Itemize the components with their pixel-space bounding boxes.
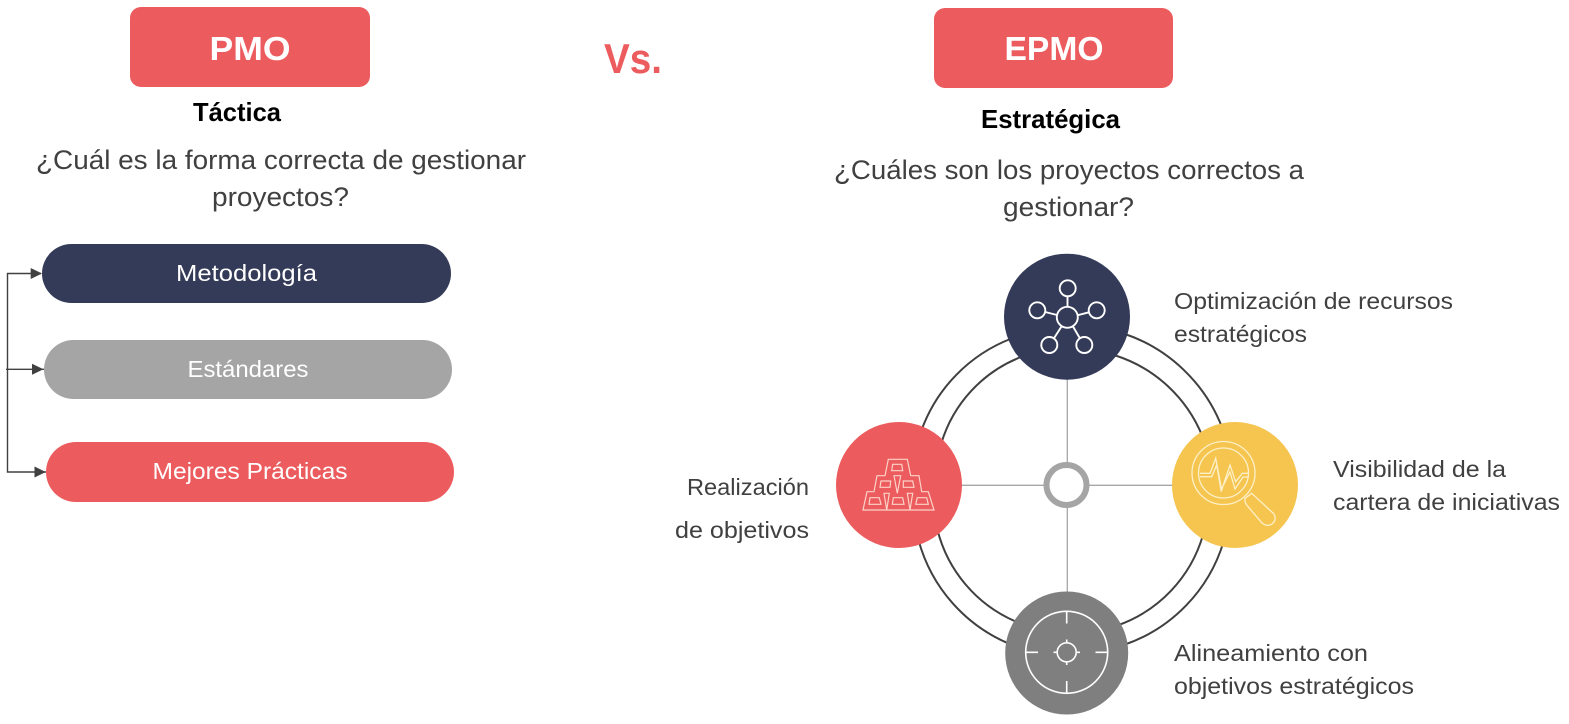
PMO subtitle: Táctica: Táctica (193, 97, 282, 127)
EPMO question: ¿Cuáles son los proyectos correctos a (834, 155, 1305, 185)
PMO question (36, 145, 526, 212)
label: Alineamiento con objetivos estratégicos (1174, 640, 1414, 699)
label: Visibilidad de la cartera de iniciativas: Visibilidad de la (1333, 456, 1506, 482)
EPMO question (834, 155, 1305, 222)
pill: Metodología: Metodología (176, 260, 317, 286)
EPMO question: gestionar? (1003, 192, 1134, 222)
icon: network on navy circle (1004, 254, 1130, 380)
concentric ring arcs (918, 334, 1224, 645)
Vs. heading: Vs. (604, 35, 662, 82)
center ring (1046, 465, 1086, 505)
pill: Estándares: Estándares (188, 356, 308, 382)
label: Alineamiento con objetivos estratégicos: Alineamiento con (1174, 640, 1368, 666)
label: Optimización de recursos estratégicos: Optimización de recursos (1174, 288, 1453, 314)
icon: target on grey circle (1005, 592, 1128, 714)
label: Visibilidad de la cartera de iniciativas: cartera de iniciativas (1333, 489, 1560, 515)
pill: Mejores Prácticas: Mejores Prácticas (152, 458, 348, 484)
EPMO badge (934, 8, 1173, 88)
label: Realización de objetivos: Realización (687, 474, 809, 500)
label: Visibilidad de la cartera de iniciativas (1333, 456, 1560, 515)
EPMO badge: EPMO (1004, 30, 1104, 67)
cross lines (899, 316, 1235, 654)
PMO badge (130, 7, 370, 87)
pill: Estándares (44, 340, 452, 399)
PMO question: proyectos? (212, 182, 349, 212)
label: Realización de objetivos (675, 474, 809, 543)
PMO question: ¿Cuál es la forma correcta de gestionar (36, 145, 526, 175)
PMO badge: PMO (210, 30, 290, 67)
icon: gold bars on red circle (836, 422, 962, 548)
label: Alineamiento con objetivos estratégicos: objetivos estratégicos (1174, 673, 1414, 699)
label: Optimización de recursos estratégicos (1174, 288, 1453, 347)
label: Optimización de recursos estratégicos: estratégicos (1174, 321, 1307, 347)
pill: Mejores Prácticas (46, 442, 454, 502)
label: Realización de objetivos: de objetivos (675, 517, 809, 543)
icon: magnifier on yellow circle (1172, 422, 1298, 548)
bracket connector with arrows (6, 268, 46, 478)
ring diagram (836, 254, 1298, 714)
pill: Metodología (42, 244, 451, 303)
EPMO subtitle: Estratégica: Estratégica (981, 104, 1121, 134)
